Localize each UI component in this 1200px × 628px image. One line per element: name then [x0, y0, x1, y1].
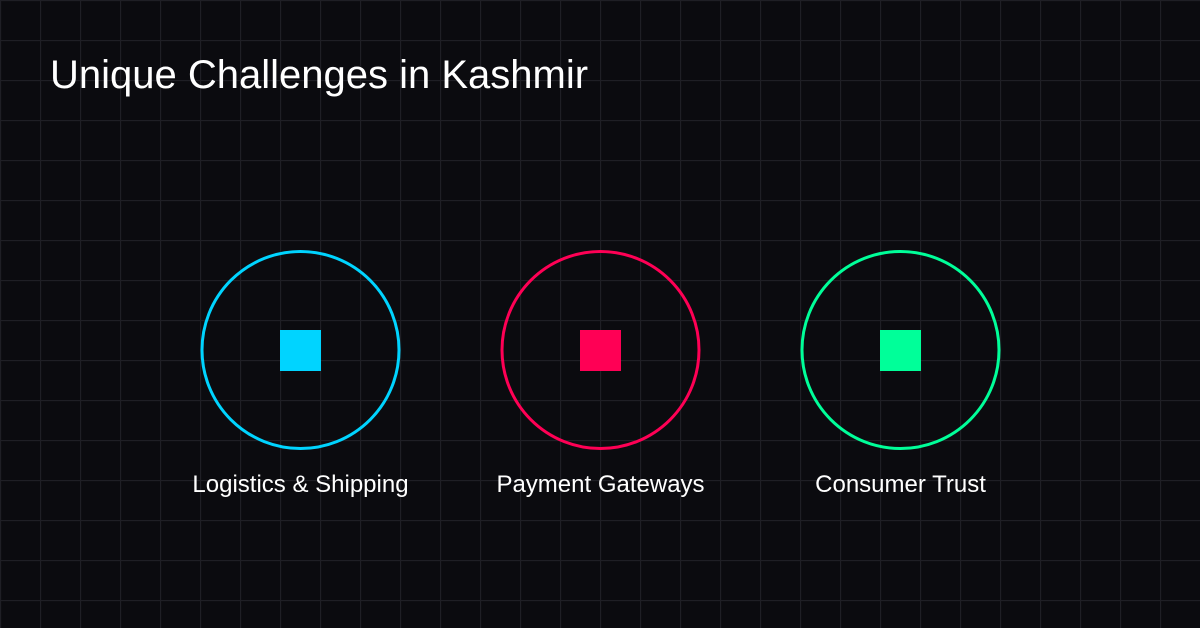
icon: red circle	[502, 252, 699, 448]
icon: cyan square	[280, 330, 321, 371]
title: Unique Challenges in Kashmir	[50, 53, 588, 97]
label: logistics: Logistics & Shipping	[192, 471, 409, 498]
item: trust	[802, 252, 999, 498]
icon: green square	[880, 330, 921, 371]
icon: cyan circle	[202, 252, 399, 448]
icon: red square	[580, 330, 621, 371]
item: logistics	[192, 252, 409, 498]
label: payment: Payment Gateways	[496, 471, 705, 498]
icon: green circle	[802, 252, 999, 448]
item: payment	[496, 252, 705, 498]
label: trust: Consumer Trust	[815, 471, 986, 498]
